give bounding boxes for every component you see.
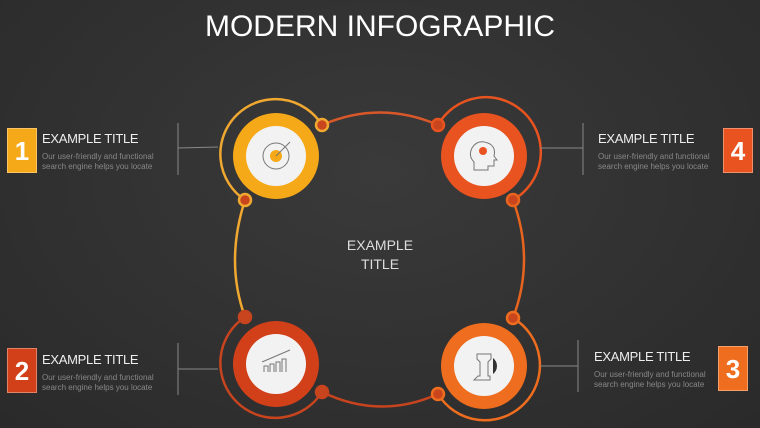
item 3 xyxy=(594,346,748,391)
circle 2 xyxy=(233,321,319,407)
text: 2 xyxy=(15,356,29,386)
center title xyxy=(347,237,413,272)
center title: TITLE xyxy=(361,256,399,272)
text: 1 xyxy=(15,136,29,166)
text: EXAMPLE TITLE xyxy=(42,352,138,367)
connector lines xyxy=(178,97,583,420)
dots xyxy=(239,119,519,400)
center title: EXAMPLE xyxy=(347,237,413,253)
text: Our user-friendly and functional search engine helps you locate xyxy=(42,373,154,392)
text: 4 xyxy=(731,136,745,166)
text: Our user-friendly and functional search engine helps you locate xyxy=(594,370,706,389)
text: 3 xyxy=(726,354,740,384)
title: MODERN INFOGRAPHIC xyxy=(205,10,555,43)
text: Our user-friendly and functional search engine helps you locate xyxy=(598,152,710,171)
text: Our user-friendly and functional search engine helps you locate xyxy=(42,152,154,171)
circle 4 xyxy=(441,113,527,199)
text: EXAMPLE TITLE xyxy=(598,131,694,146)
item 1 xyxy=(7,128,154,173)
text: EXAMPLE TITLE xyxy=(594,349,690,364)
circle 1 xyxy=(233,113,319,199)
circle 3 xyxy=(441,323,527,409)
item 4 xyxy=(598,128,753,173)
item 2 xyxy=(7,348,154,393)
text: EXAMPLE TITLE xyxy=(42,131,138,146)
